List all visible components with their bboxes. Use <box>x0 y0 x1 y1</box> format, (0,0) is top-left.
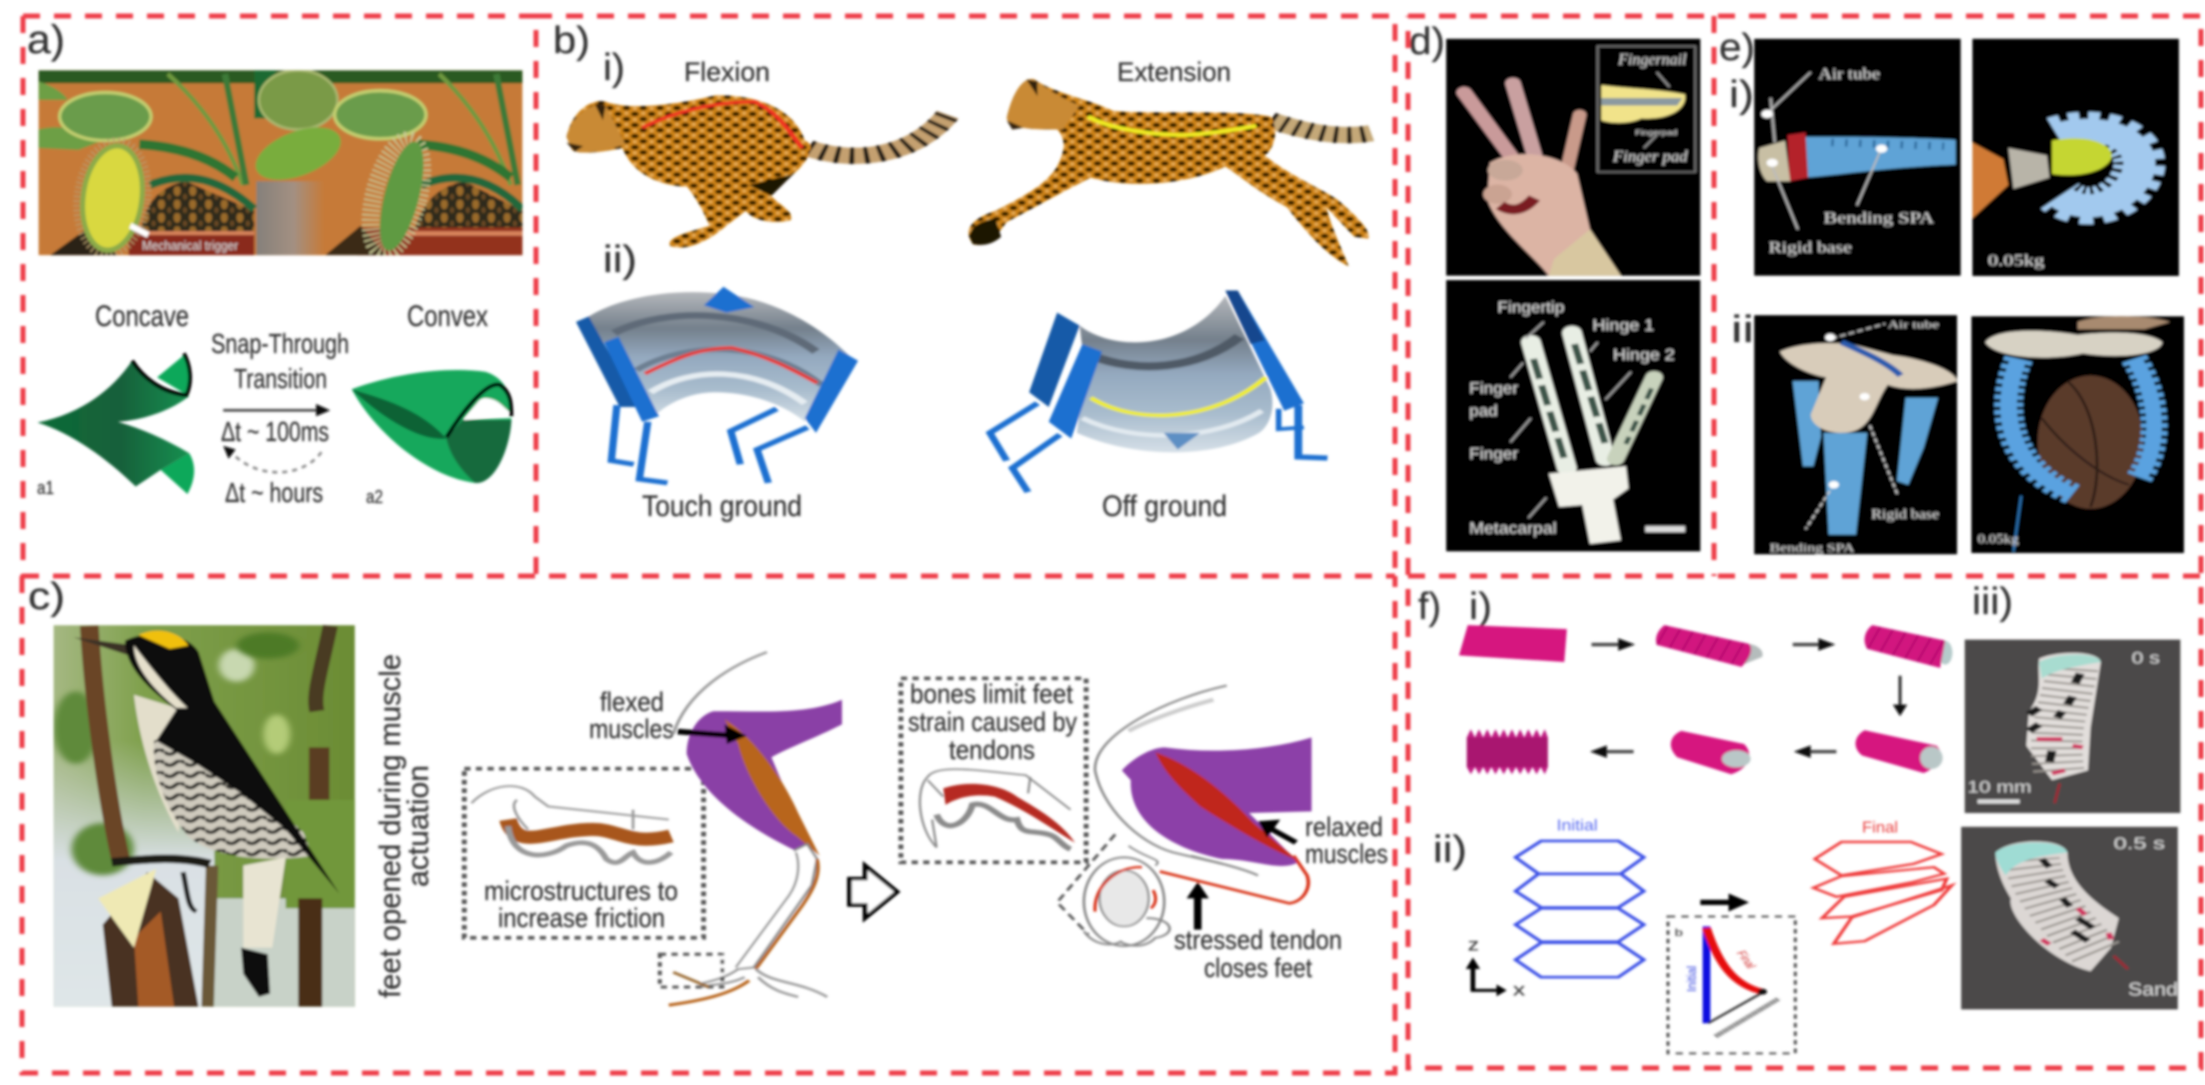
single actuator photo: Air tube <box>1818 66 1880 83</box>
printed soft finger: Hinge 2 <box>1613 346 1675 363</box>
dashed inset: bones limit feet strain <box>901 678 1086 862</box>
label: flexed muscles: flexed <box>600 687 664 717</box>
sub-label iii: iii) <box>1972 581 2013 623</box>
dashed inset: microstructures <box>464 769 704 938</box>
robot touching ground <box>576 287 858 483</box>
arrow: to relaxed muscle <box>1258 820 1296 843</box>
single actuator photo: Rigid base <box>1769 239 1852 256</box>
printed soft finger: Finger <box>1469 379 1518 397</box>
arrow 3 <box>1893 676 1907 716</box>
woodpecker painting <box>54 625 355 1007</box>
convex leaf shape <box>352 370 512 483</box>
panel e label: e) <box>1719 27 1755 69</box>
cheetah in flexion <box>566 95 948 248</box>
label: relaxed muscles: muscles <box>1305 839 1388 869</box>
step 4: tube <box>1856 730 1943 773</box>
actuator gripping tennis ball: 0.05kg <box>1988 252 2045 269</box>
label: flexed muscles <box>589 687 674 744</box>
actuator gripping tennis ball <box>1972 39 2179 276</box>
inset: fingernail section: Finger pad <box>1612 148 1688 166</box>
printed soft finger: pad <box>1469 402 1498 420</box>
label: stressed tendon closes feet: stressed tendon <box>1174 925 1342 955</box>
three-finger gripper photo: Bending SPA <box>1770 541 1855 555</box>
heading: Concave: Concave <box>95 300 189 333</box>
printed soft finger: Metacarpal <box>1469 519 1557 537</box>
arrow: to flexed muscle <box>678 724 747 744</box>
heading: Convex: Convex <box>407 300 488 333</box>
crawler photo 0 s <box>1965 640 2180 813</box>
step 1: flat sheet <box>1459 625 1567 662</box>
step 3: rolled <box>1865 625 1952 668</box>
arrow: initial to final <box>1700 893 1749 912</box>
step 2: partly rolled <box>1656 625 1763 667</box>
heading: Flexion: Flexion <box>684 57 770 87</box>
xz axes <box>1466 935 1525 999</box>
label: relaxed muscles: relaxed <box>1305 812 1383 842</box>
dashed inset: deformation plot <box>1668 916 1795 1053</box>
panel d label: d) <box>1409 21 1445 63</box>
caption: microstructures to increase friction: increase friction <box>498 903 665 933</box>
sub-label i: i) <box>603 47 625 89</box>
printed soft finger <box>1446 280 1700 551</box>
label: relaxed muscles <box>1305 812 1388 869</box>
panel f: origami-like soft crawler <box>1418 581 2180 1053</box>
caption: bones limit feet strain caused by tendons: tendons <box>949 735 1035 765</box>
state a1: a1 <box>37 478 54 498</box>
label: flexed muscles: muscles <box>589 714 674 744</box>
caption: bones limit feet strain caused by tendons: bones limit feet <box>910 679 1073 709</box>
inset: fingernail section <box>1598 46 1695 172</box>
foot claws with dashed outline <box>1057 834 1170 946</box>
xz axes: x <box>1513 980 1525 999</box>
dashed inset: deformation plot: Initial <box>1686 966 1700 992</box>
arrow 4 <box>1794 745 1836 758</box>
arrow 5 <box>1590 745 1634 758</box>
label: hours: Δt ~ hours <box>225 477 323 508</box>
bird leg with flexed muscles <box>660 652 842 1005</box>
label: snap-through transition <box>211 328 349 394</box>
caption: Off ground: Off ground <box>1102 490 1227 523</box>
panel a: Venus flytrap snap-through <box>27 18 522 508</box>
state a2: a2 <box>366 487 383 507</box>
cheetah in extension <box>969 79 1371 266</box>
dashed inset: deformation plot: Final <box>1733 950 1758 970</box>
sub-label i: i) <box>1469 586 1492 628</box>
crawler photo 0 s: 0 s <box>2132 649 2160 667</box>
three-finger gripper photo: Air tube <box>1888 319 1940 331</box>
caption: Touch ground: Touch ground <box>642 490 802 523</box>
panel c: woodpecker foot mechanism <box>28 576 1388 1007</box>
panel c label: c) <box>28 576 65 618</box>
single actuator photo <box>1754 39 1961 276</box>
gripper holding basketball: 0.05kg <box>1978 532 2019 546</box>
sub-label ii: ii <box>1731 309 1754 351</box>
label: stressed tendon closes feet <box>1174 925 1342 983</box>
crawler photo 0.5 s <box>1961 827 2178 1009</box>
label: stressed tendon closes feet: closes feet <box>1204 953 1312 983</box>
printed soft finger: Hinge 1 <box>1593 316 1654 334</box>
caption: bones limit feet strain caused by tendons: strain caused by <box>908 707 1077 737</box>
panel a label: a) <box>27 18 65 62</box>
heading: Extension: Extension <box>1117 57 1231 87</box>
flytrap photos <box>39 70 522 257</box>
single actuator photo: Bending SPA <box>1824 210 1934 227</box>
step 5: tube with hollow <box>1671 731 1751 774</box>
concave leaf shape <box>37 353 194 494</box>
panel b label: b) <box>553 20 590 62</box>
arrow: forward snap <box>223 404 330 416</box>
sub-label ii: ii) <box>1433 829 1467 871</box>
caption: mechanical trigger: Mechanical trigger <box>142 238 239 253</box>
crawler photo 0.5 s: 0.5 s <box>2114 835 2165 853</box>
arrow: to stressed tendon <box>1187 882 1209 930</box>
printed soft finger: Finger <box>1469 445 1518 462</box>
rotated caption: feet opened during muscle actuation <box>374 654 435 998</box>
red final honeycomb <box>1813 819 1952 944</box>
rotated caption: feet opened during muscle actuation: actuation <box>402 765 435 887</box>
crawler photo 0.5 s: Sand <box>2128 979 2178 1000</box>
dashed inset: deformation plot: b <box>1675 927 1683 938</box>
arrow 1 <box>1591 638 1635 651</box>
label: 100 ms: Δt ~ 100ms <box>221 416 329 447</box>
panel d: soft finger <box>1409 21 1700 551</box>
three-finger gripper photo: Rigid base <box>1871 506 1939 522</box>
three-finger gripper photo <box>1754 315 1957 555</box>
crawler photo 0 s: 10 mm <box>1967 778 2031 796</box>
printed soft finger: Fingertip <box>1498 299 1564 316</box>
blue initial honeycomb <box>1516 817 1644 977</box>
inset: fingernail section: Fingerpad <box>1635 128 1677 137</box>
sub-label ii: ii) <box>603 239 637 281</box>
inset: fingernail section: Fingernail <box>1617 52 1686 69</box>
panel b: cheetah and robot <box>553 20 1371 523</box>
sub-label i: i) <box>1729 74 1754 116</box>
step 6: final spiked body <box>1467 729 1548 774</box>
caption: microstructures to increase friction <box>484 876 678 933</box>
robot off ground <box>990 290 1327 492</box>
hollow transition arrow <box>850 866 897 918</box>
blue initial honeycomb: Initial <box>1557 817 1598 834</box>
arrow: slow recovery <box>223 446 321 472</box>
panel f label: f) <box>1418 586 1441 628</box>
caption: bones limit feet strain caused by tendons <box>908 679 1077 765</box>
rotated caption: feet opened during muscle actuation: feet opened during muscle <box>374 654 407 998</box>
caption: microstructures to increase friction: microstructures to <box>484 876 678 906</box>
bird leg with relaxed muscles <box>1095 686 1312 903</box>
hand photo <box>1446 39 1700 276</box>
label: snap-through transition: Transition <box>234 363 327 394</box>
gripper holding basketball <box>1971 316 2184 553</box>
red final honeycomb: Final <box>1862 819 1898 837</box>
panel e: soft pneumatic gripper <box>1719 27 2184 555</box>
label: snap-through transition: Snap-Through <box>211 328 349 359</box>
fold sequence <box>1459 625 1952 774</box>
arrow 2 <box>1793 638 1835 651</box>
xz axes: z <box>1468 935 1479 954</box>
